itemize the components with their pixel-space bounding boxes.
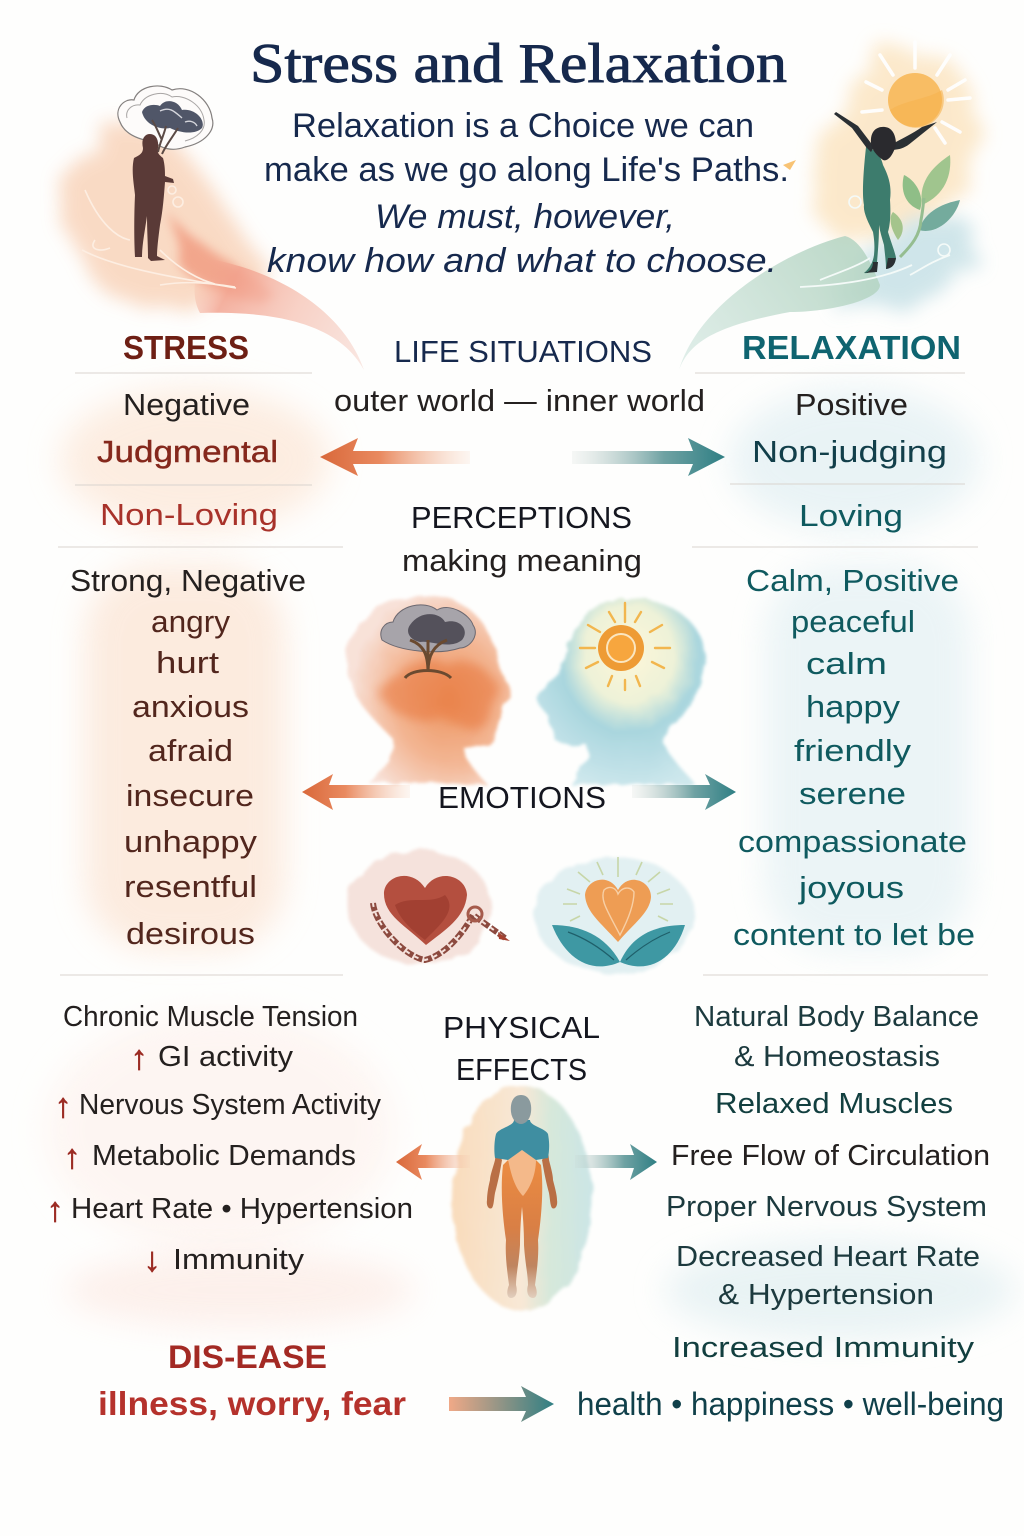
arrow: outcome — [449, 1386, 554, 1422]
stress heading block: Negative — [123, 387, 250, 422]
stress physical effects: Chronic Muscle Tension — [63, 1001, 358, 1033]
center: perceptions: making meaning — [402, 543, 642, 578]
illustration: calm head — [537, 598, 705, 785]
center: perceptions: PERCEPTIONS — [411, 500, 632, 535]
center: perceptions — [402, 500, 642, 578]
title: Stress and Relaxation — [250, 33, 787, 95]
relaxation physical effects: Increased Immunity — [672, 1332, 975, 1364]
relaxation physical effects: Proper Nervous System — [666, 1191, 987, 1223]
legs — [502, 1160, 523, 1298]
center: physical effects heading: PHYSICAL — [443, 1010, 600, 1045]
torso lower — [508, 1150, 536, 1196]
outcome: dis-ease: illness, worry, fear — [98, 1385, 406, 1422]
swoosh: stress — [195, 258, 364, 370]
relaxation heading block: RELAXATION — [742, 329, 961, 366]
stress heading block: Judgmental — [97, 434, 278, 469]
icon: up arrow: ↑ — [64, 1138, 80, 1176]
swoosh: relaxation — [679, 236, 880, 370]
stress emotions list: unhappy — [124, 824, 258, 859]
intro text: We must, however, — [375, 198, 675, 236]
icon: down arrow: ↓ — [144, 1241, 160, 1279]
panel: relaxation washes — [665, 388, 1015, 1340]
relaxation emotions list — [733, 563, 975, 952]
stress emotions list: afraid — [148, 733, 233, 768]
intro text — [264, 107, 789, 280]
arms — [487, 1150, 502, 1209]
relaxation heading block — [742, 329, 961, 533]
stress emotions list: resentful — [124, 869, 257, 904]
speck near text — [783, 160, 796, 170]
center: physical effects heading: EFFECTS — [456, 1052, 587, 1087]
relaxation physical effects: & Homeostasis — [734, 1041, 940, 1073]
stress heading block: STRESS — [123, 329, 249, 366]
leaves — [921, 155, 950, 205]
relaxation emotions list: serene — [799, 776, 906, 811]
intro text: Relaxation is a Choice we can — [292, 107, 754, 145]
relaxation physical effects — [666, 1001, 990, 1364]
stress physical effects: Nervous System Activity — [79, 1089, 381, 1121]
stress physical effects: GI activity — [158, 1041, 294, 1073]
relaxation physical effects: Decreased Heart Rate — [676, 1241, 980, 1273]
stress physical effects: Heart Rate • Hypertension — [71, 1193, 413, 1225]
relaxation emotions list: calm — [806, 646, 887, 681]
arrow: physical right — [575, 1144, 657, 1180]
outcome: dis-ease: DIS-EASE — [168, 1339, 327, 1375]
head — [511, 1095, 531, 1124]
illustration: human body figure — [452, 1086, 592, 1310]
panel: stress washes — [45, 388, 415, 1328]
illustration: stressed head — [347, 596, 511, 785]
arrow: emotions left — [302, 774, 410, 810]
illustration: lotus heart — [534, 857, 694, 973]
center: life situations: outer world — inner world — [334, 383, 705, 418]
relaxation emotions list: compassionate — [738, 824, 967, 859]
stress emotions list: anxious — [132, 689, 249, 724]
relaxation physical effects: Free Flow of Circulation — [671, 1140, 990, 1172]
outcome: well-being: health • happiness • well-being — [577, 1386, 1004, 1422]
relaxation heading block: Non-judging — [752, 434, 947, 469]
icon: up arrow: ↑ — [46, 1191, 64, 1229]
stress physical effects: Metabolic Demands — [92, 1140, 356, 1172]
sun — [862, 42, 970, 143]
stress emotions list: insecure — [126, 778, 254, 813]
relaxation emotions list: content to let be — [733, 917, 975, 952]
relaxation heading block: Loving — [799, 498, 903, 533]
sun — [580, 603, 670, 690]
storm tree — [118, 86, 213, 149]
center: physical effects heading — [443, 1010, 600, 1087]
relaxation emotions list: peaceful — [791, 604, 915, 639]
figure — [863, 147, 896, 273]
stress heading block: Non-Loving — [100, 497, 278, 532]
stress heading block — [97, 329, 278, 532]
illustration: stressed person with storm tree — [63, 86, 364, 370]
intro text: make as we go along Life's Paths. — [264, 151, 789, 189]
icon: up arrow: ↑ — [54, 1087, 72, 1125]
relaxation physical effects: & Hypertension — [718, 1279, 934, 1311]
storm tree — [381, 605, 475, 652]
arrow: situations left — [320, 438, 470, 476]
intro text: know how and what to choose. — [267, 242, 777, 280]
relaxation emotions list: friendly — [794, 733, 912, 768]
center: emotions label: EMOTIONS — [438, 780, 606, 815]
icon: up arrow: ↑ — [130, 1039, 148, 1077]
stress emotions list: Strong, Negative — [70, 563, 306, 598]
stress emotions list: desirous — [126, 916, 255, 951]
torso upper — [494, 1120, 549, 1160]
illustration: woman and sun — [679, 42, 978, 370]
relaxation heading block: Positive — [795, 387, 908, 422]
illustration: chained heart — [348, 850, 510, 964]
relaxation physical effects: Relaxed Muscles — [715, 1088, 953, 1120]
relaxation emotions list: happy — [806, 689, 901, 724]
arrow: emotions right — [632, 774, 736, 810]
stress physical effects: Immunity — [173, 1244, 305, 1276]
stress emotions list — [70, 563, 306, 951]
stress emotions list: hurt — [156, 645, 219, 680]
arrow: physical left — [396, 1144, 470, 1180]
column dividers — [58, 373, 988, 975]
center: life situations — [334, 334, 705, 418]
silhouette — [133, 134, 174, 261]
relaxation emotions list: joyous — [798, 870, 904, 905]
arrow: situations right — [572, 438, 725, 476]
relaxation physical effects: Natural Body Balance — [694, 1001, 979, 1033]
stress emotions list: angry — [151, 604, 231, 639]
relaxation emotions list: Calm, Positive — [746, 563, 959, 598]
outcome: dis-ease — [98, 1339, 406, 1422]
center: life situations: LIFE SITUATIONS — [394, 334, 652, 369]
stress physical effects — [46, 1001, 413, 1279]
